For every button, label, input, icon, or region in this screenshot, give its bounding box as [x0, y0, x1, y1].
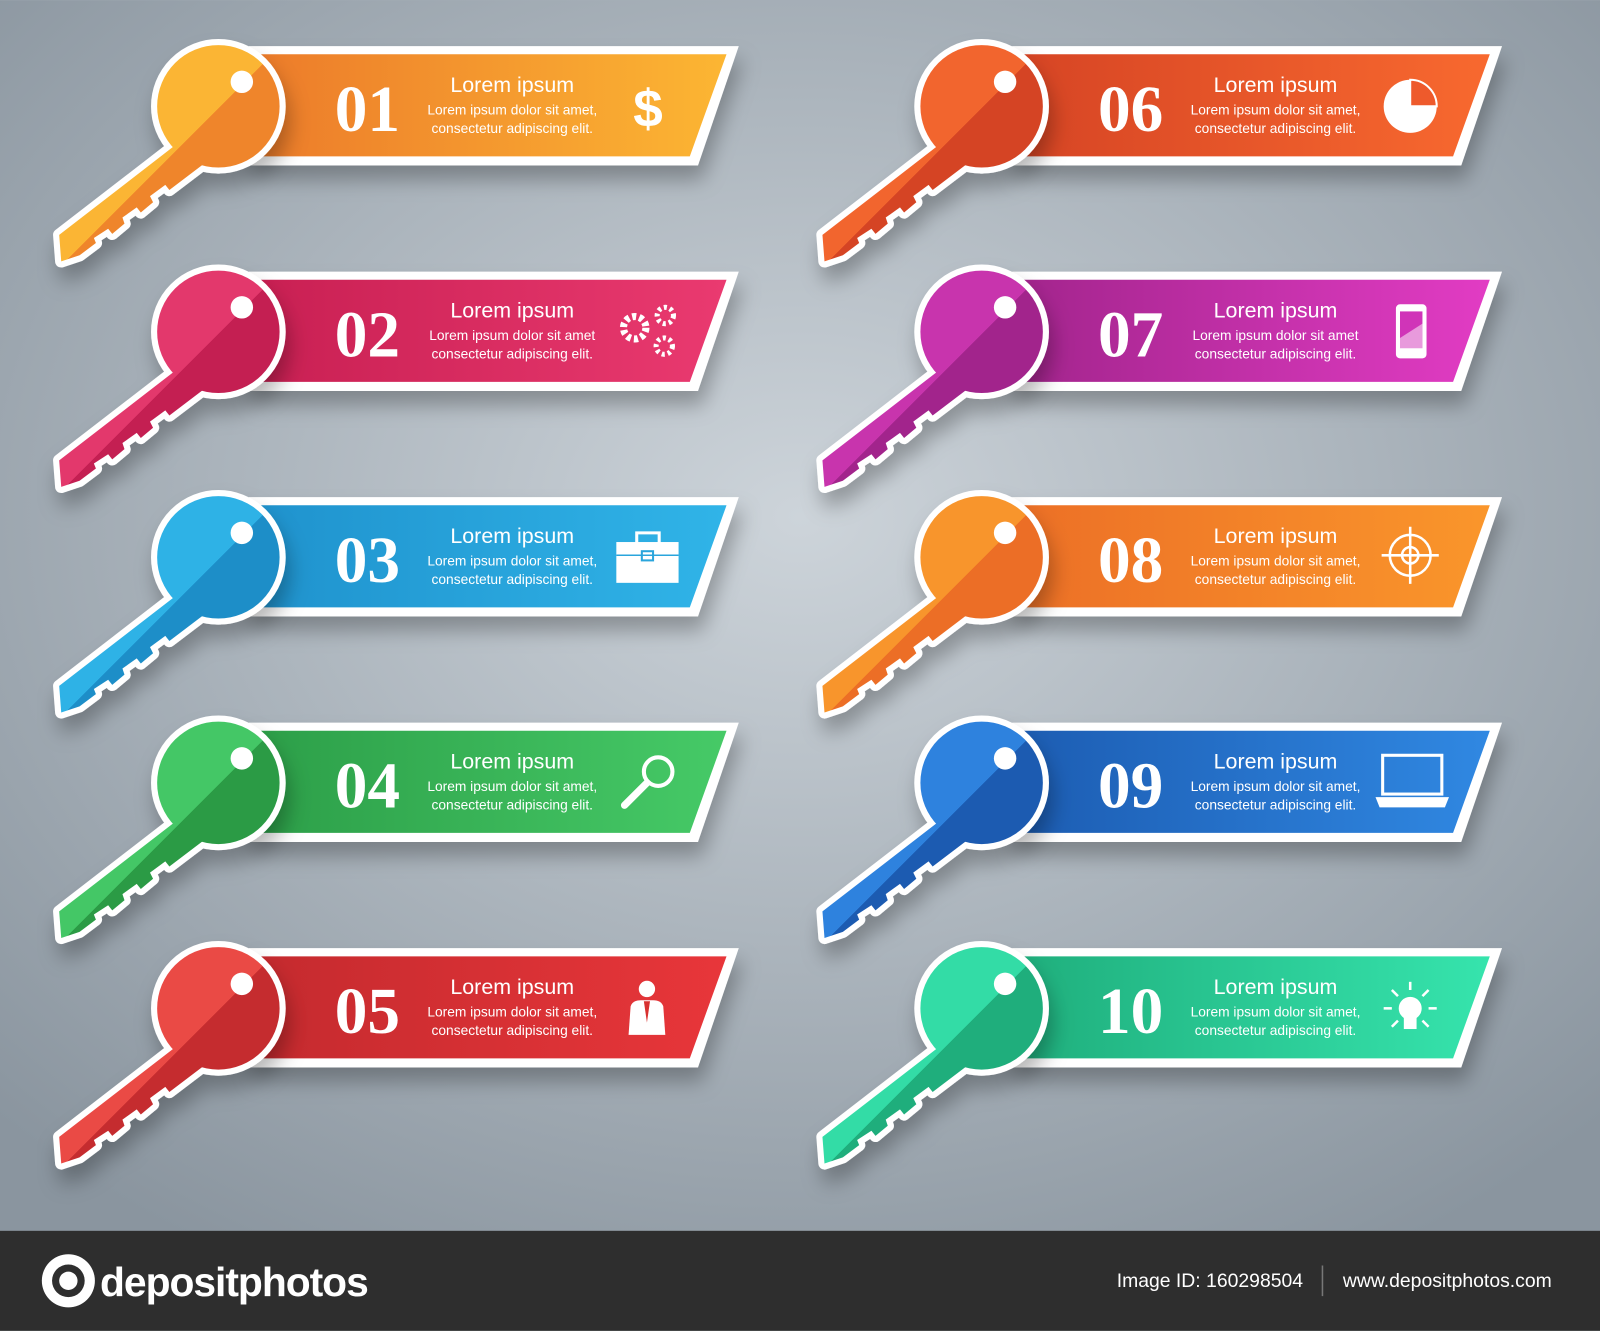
- item 08: Lorem ipsum dolor sit amet,: [1191, 553, 1360, 568]
- item 10: Lorem ipsum dolor sit amet,: [1191, 1005, 1360, 1020]
- item 09: Lorem ipsum: [1214, 750, 1337, 774]
- item 08: consectetur adipiscing elit.: [1195, 572, 1356, 587]
- item 03: Lorem ipsum dolor sit amet,: [427, 553, 597, 568]
- item 03: consectetur adipiscing elit.: [432, 572, 593, 587]
- item 09: Lorem ipsum dolor sit amet,: [1191, 779, 1360, 794]
- item 10: [822, 947, 1502, 1163]
- item 01: consectetur adipiscing elit.: [432, 121, 593, 136]
- item 06: Lorem ipsum dolor sit amet,: [1191, 102, 1360, 117]
- icon: laptop: [1376, 755, 1449, 807]
- item 08: 08: [1098, 525, 1163, 597]
- item 02: 02: [335, 299, 400, 371]
- item 10: consectetur adipiscing elit.: [1195, 1023, 1356, 1038]
- footer logo: depositphotos: [100, 1259, 368, 1305]
- item 03: 03: [335, 525, 400, 597]
- item 10: 10: [1098, 976, 1163, 1048]
- icon: briefcase: [616, 533, 679, 583]
- item 01: [59, 45, 739, 261]
- item 04: 04: [335, 750, 400, 822]
- item 10: Lorem ipsum: [1214, 975, 1337, 999]
- item 02: Lorem ipsum: [450, 299, 574, 323]
- item 06: [822, 45, 1502, 261]
- icon: phone: [1396, 304, 1427, 358]
- item 02: [59, 271, 739, 487]
- item 07: 07: [1098, 299, 1163, 371]
- item 05: 05: [335, 976, 400, 1048]
- item 04: Lorem ipsum: [450, 750, 574, 774]
- item 01: Lorem ipsum: [450, 73, 574, 97]
- item 04: consectetur adipiscing elit.: [432, 797, 593, 812]
- icon: pie chart: [1384, 80, 1437, 133]
- item 06: Lorem ipsum: [1214, 73, 1337, 97]
- item 06: 06: [1098, 74, 1163, 146]
- footer: [0, 1231, 1600, 1331]
- item 05: [59, 947, 739, 1163]
- item 07: [822, 271, 1502, 487]
- item 06: consectetur adipiscing elit.: [1195, 121, 1356, 136]
- item 08: Lorem ipsum: [1214, 524, 1337, 548]
- item 09: consectetur adipiscing elit.: [1195, 797, 1356, 812]
- item 01: 01: [335, 74, 400, 146]
- icon: light bulb: [1384, 982, 1437, 1028]
- icon: magnifier: [624, 757, 672, 805]
- item 02: Lorem ipsum dolor sit amet: [429, 328, 595, 343]
- item 05: Lorem ipsum dolor sit amet,: [427, 1005, 597, 1020]
- item 04: [59, 722, 739, 938]
- item 03: [59, 496, 739, 712]
- item 07: Lorem ipsum dolor sit amet: [1193, 328, 1359, 343]
- item 08: [822, 496, 1502, 712]
- item 01: Lorem ipsum dolor sit amet,: [427, 102, 597, 117]
- item 07: consectetur adipiscing elit.: [1195, 346, 1356, 361]
- item 05: consectetur adipiscing elit.: [432, 1023, 593, 1038]
- footer image id: Image ID: 160298504: [1117, 1270, 1303, 1292]
- item 09: [822, 722, 1502, 938]
- item 09: 09: [1098, 750, 1163, 822]
- icon: gears: [623, 307, 673, 354]
- item 05: Lorem ipsum: [450, 975, 574, 999]
- icon: dollar: $: [633, 80, 663, 139]
- icon: person: [629, 981, 665, 1035]
- item 04: Lorem ipsum dolor sit amet,: [427, 779, 597, 794]
- item 07: Lorem ipsum: [1214, 299, 1337, 323]
- footer url: www.depositphotos.com: [1342, 1270, 1552, 1292]
- icon: target: [1382, 527, 1439, 584]
- item 02: consectetur adipiscing elit.: [432, 346, 593, 361]
- item 03: Lorem ipsum: [450, 524, 574, 548]
